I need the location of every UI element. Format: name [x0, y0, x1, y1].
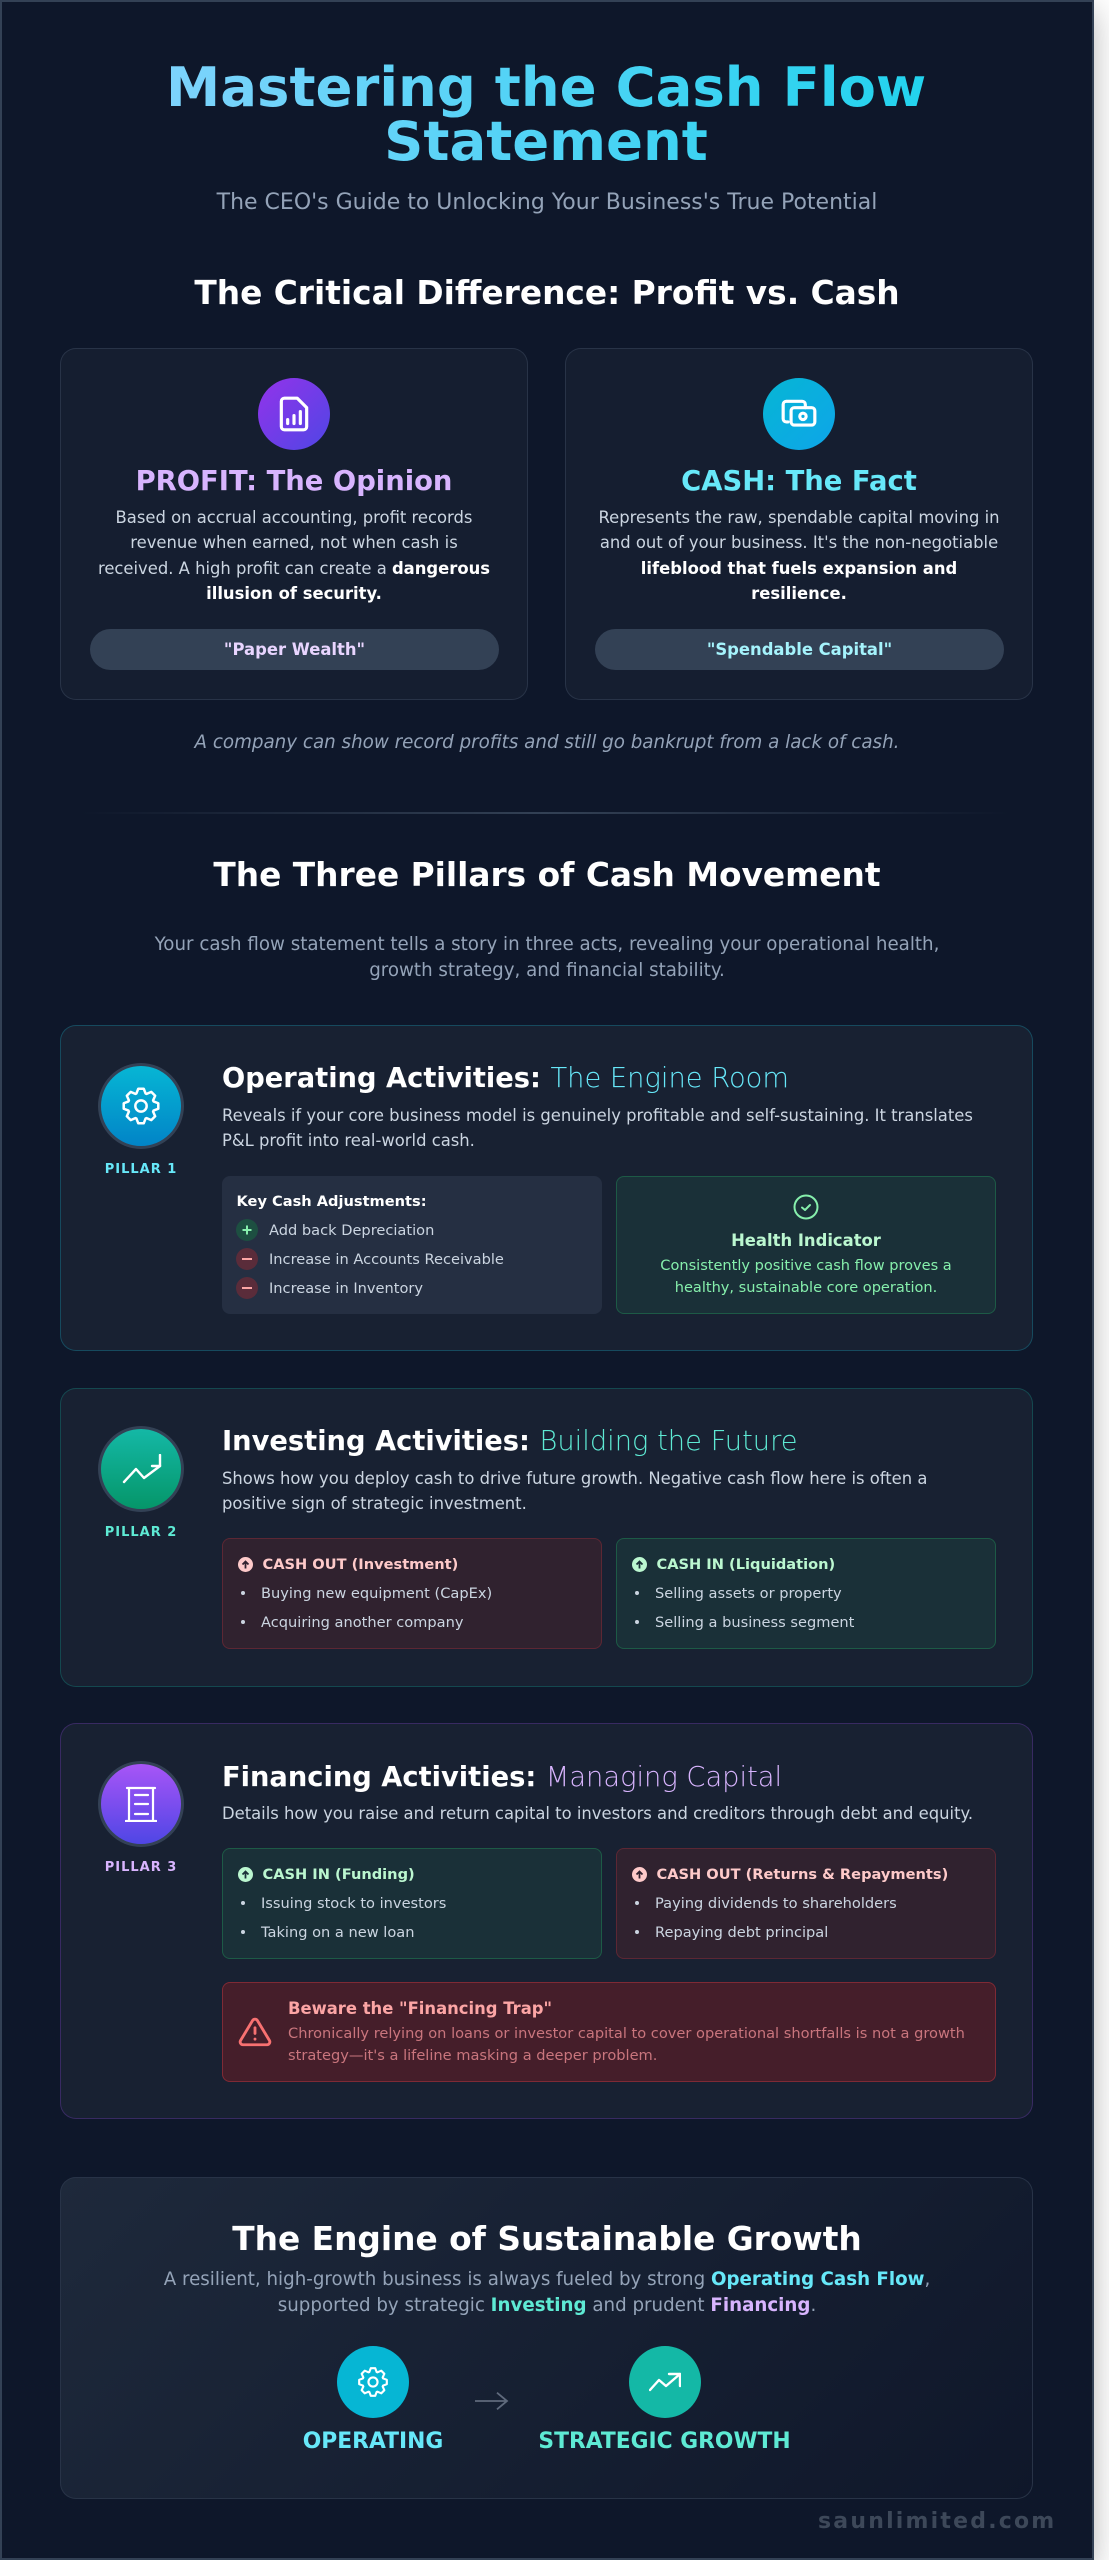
icon: warning triangle [238, 2018, 272, 2046]
item: Selling assets or property [655, 1585, 842, 1602]
icon: profit document [258, 378, 330, 450]
cash out heading: CASH OUT (Investment) [262, 1556, 458, 1573]
heading: three pillars: The Three Pillars of Cash Movement [213, 856, 881, 894]
icon: ledger building [98, 1761, 184, 1847]
health text: healthy, sustainable core operation. [675, 1278, 937, 1296]
pillar 2 label: PILLAR 2 [105, 1525, 177, 1540]
icon: growth chart [628, 2346, 700, 2418]
profit description [98, 508, 490, 603]
pillar 3 label: PILLAR 3 [105, 1860, 177, 1875]
intro paragraph [154, 934, 939, 981]
title: Mastering the Cash Flow [166, 55, 926, 119]
cash description: resilience. [751, 584, 847, 603]
cash in heading: CASH IN (Funding) [262, 1866, 415, 1883]
health heading: Health Indicator [731, 1230, 881, 1250]
pillar 2 description: positive sign of strategic investment. [222, 1494, 527, 1513]
panel: engine of sustainable growth [60, 2177, 1033, 2499]
operating label: OPERATING [303, 2428, 443, 2454]
trap heading: Beware the "Financing Trap" [288, 1998, 552, 2018]
pill: paper wealth [90, 629, 499, 670]
intro paragraph: growth strategy, and financial stability. [369, 960, 725, 981]
pillar 2 description: Shows how you deploy cash to drive future growth. Negative cash flow here is often a [222, 1468, 927, 1488]
cash out heading: CASH OUT (Returns & Repayments) [656, 1866, 948, 1883]
strategic growth label: STRATEGIC GROWTH [538, 2428, 791, 2454]
item: Issuing stock to investors [261, 1895, 446, 1912]
panel: cash [565, 348, 1033, 700]
icon: cash banknotes [763, 378, 835, 450]
item: Buying new equipment (CapEx) [261, 1585, 492, 1602]
profit description: Based on accrual accounting, profit records [116, 508, 472, 526]
subtitle: The CEO's Guide to Unlocking Your Business's True Potential [217, 190, 877, 215]
icon: arrow circle [238, 1557, 253, 1572]
icon: arrow circle [632, 1867, 647, 1882]
title: Statement [384, 109, 708, 173]
pillar 1 title: Operating Activities: The Engine Room [222, 1063, 789, 1094]
icon: minus [236, 1248, 258, 1270]
health indicator box [616, 1176, 996, 1314]
item: Repaying debt principal [655, 1924, 828, 1941]
pill: paper wealth: "Paper Wealth" [224, 640, 365, 659]
pill: spendable capital [595, 629, 1004, 670]
cash heading: CASH: The Fact [681, 466, 917, 497]
cash description: and out of your business. It's the non-negotiable [600, 533, 998, 552]
growth text: A resilient, high-growth business is always fueled by strong Operating Cash Flow, [164, 2269, 930, 2290]
profit description: illusion of security. [206, 584, 382, 603]
cash description: lifeblood that fuels expansion and [641, 559, 957, 578]
pill: spendable capital: "Spendable Capital" [707, 640, 892, 659]
panel: pillar 2 investing [60, 1388, 1033, 1687]
cash out box [222, 1538, 602, 1649]
cash in heading: CASH IN (Liquidation) [656, 1556, 835, 1573]
trap text [288, 2024, 965, 2064]
watermark: saunlimited.com [818, 2509, 1056, 2534]
pillar 2 description [222, 1468, 927, 1513]
key adjustments heading: Key Cash Adjustments: [236, 1193, 427, 1210]
icon: plus [236, 1219, 258, 1241]
icon: trending chart [98, 1426, 184, 1512]
item: Selling a business segment [655, 1614, 854, 1631]
item: Taking on a new loan [261, 1924, 414, 1941]
icon: operating gear [337, 2346, 409, 2418]
item: Paying dividends to shareholders [655, 1895, 897, 1912]
growth text [164, 2269, 930, 2316]
trap text: strategy—it's a lifeline masking a deeper problem. [288, 2046, 657, 2064]
adjustment: receivable: Increase in Accounts Receivable [269, 1251, 504, 1268]
cash in box [616, 1538, 996, 1649]
growth heading: The Engine of Sustainable Growth [232, 2220, 862, 2258]
profit description: revenue when earned, not when cash is [130, 533, 458, 552]
pillar 3 description: Details how you raise and return capital to investors and creditors through debt and equity. [222, 1804, 973, 1822]
arrow [475, 2392, 508, 2410]
trap text: Chronically relying on loans or investor capital to cover operational shortfalls is not a growth [288, 2024, 965, 2042]
icon: minus [236, 1277, 258, 1299]
pillar 1 description: Reveals if your core business model is genuinely profitable and self-sustaining. It translates [222, 1106, 973, 1124]
adjustment: depreciation: Add back Depreciation [269, 1222, 434, 1239]
item: Acquiring another company [261, 1614, 464, 1631]
intro paragraph: Your cash flow statement tells a story in three acts, revealing your operational health, [155, 934, 939, 955]
adjustment: inventory: Increase in Inventory [269, 1280, 423, 1297]
cash description: Represents the raw, spendable capital moving in [598, 508, 1000, 526]
health text: Consistently positive cash flow proves a [660, 1256, 952, 1274]
panel: pillar 1 operating [60, 1025, 1033, 1351]
profit description: received. A high profit can create a dangerous [98, 559, 490, 578]
growth text: supported by strategic Investing and prudent Financing. [278, 2295, 816, 2316]
icon: arrow circle [238, 1867, 253, 1882]
panel: profit [60, 348, 528, 700]
heading: profit vs cash: The Critical Difference: Profit vs. Cash [194, 274, 900, 312]
italic note: A company can show record profits and still go bankrupt from a lack of cash. [195, 732, 899, 753]
panel: pillar 3 financing [60, 1723, 1033, 2119]
pillar 1 label: PILLAR 1 [105, 1162, 177, 1177]
pillar 1 description: P&L profit into real-world cash. [222, 1131, 475, 1150]
pillar 3 title: Financing Activities: Managing Capital [222, 1762, 782, 1793]
cash description [598, 508, 1000, 603]
health text [660, 1256, 952, 1296]
title [166, 60, 926, 168]
icon: arrow circle [632, 1557, 647, 1572]
cash out box [616, 1848, 996, 1959]
icon: gear [98, 1063, 184, 1149]
callout: financing trap [222, 1982, 996, 2082]
pillar 2 title: Investing Activities: Building the Future [222, 1426, 798, 1457]
key cash adjustments box [222, 1176, 602, 1314]
profit heading: PROFIT: The Opinion [136, 466, 452, 497]
icon: check circle [794, 1194, 818, 1220]
cash in box [222, 1848, 602, 1959]
pillar 1 description [222, 1106, 973, 1150]
